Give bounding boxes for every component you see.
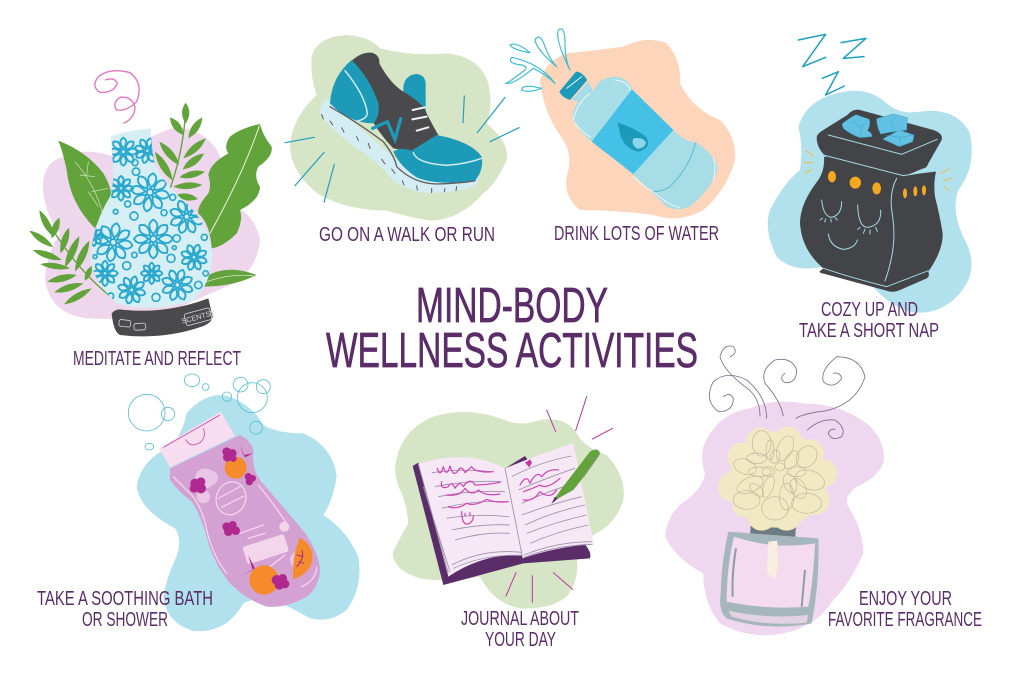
icon: bottle body	[170, 435, 320, 607]
icon: orange glow dots	[828, 171, 926, 198]
caption: nap: TAKE A SHORT NAP	[799, 320, 939, 342]
illustration: shower gel bottle	[128, 374, 359, 631]
icon: sleep Zs	[798, 34, 866, 95]
peach blob	[540, 40, 735, 218]
panel: meditate and reflect	[29, 71, 272, 370]
shoe tongue	[403, 74, 426, 113]
caption: MEDITATE AND REFLECT	[73, 348, 241, 370]
icon: water splash	[506, 29, 570, 91]
icon: fragrance swirls	[709, 346, 865, 439]
illustration: open journal	[393, 397, 624, 609]
blue blob	[768, 91, 972, 313]
caption: walk or run: GO ON A WALK OR RUN	[319, 224, 495, 246]
pink blob	[43, 127, 260, 319]
scribbled writing	[437, 459, 560, 524]
icon: green pen	[551, 450, 600, 504]
pink blob	[665, 402, 884, 635]
illustration: running shoe	[285, 29, 735, 221]
caption: drink water: DRINK LOTS OF WATER	[554, 223, 719, 245]
panel: journal	[393, 397, 624, 651]
pale decoration	[195, 468, 307, 568]
icon: big left leaf	[58, 141, 111, 228]
shoe heel	[330, 60, 379, 123]
shoe stitching and laces	[322, 71, 482, 193]
green blob	[290, 35, 507, 221]
icon: fern upper right	[155, 103, 206, 201]
icon: wax cubes	[842, 114, 914, 147]
sparkle lines	[506, 397, 613, 602]
icon: magenta berries	[190, 445, 289, 590]
icon: diffuser base	[112, 298, 216, 336]
icon: glass bottle	[720, 532, 819, 627]
panel: go on a walk or run	[285, 29, 735, 246]
caption: journal: JOURNAL ABOUT	[461, 608, 579, 630]
icon: bottle cap	[159, 412, 235, 467]
icon: bottle neck	[750, 526, 796, 539]
icon: small bottom leaf	[204, 270, 257, 287]
motion lines	[285, 96, 519, 202]
icon: fern lower left	[29, 210, 110, 304]
icon: warmer body	[800, 110, 943, 292]
title	[326, 279, 698, 378]
caption: journal	[461, 608, 579, 651]
shoe dark upper	[352, 53, 438, 152]
illustration: fragrance flower diffuser	[665, 346, 884, 635]
shoe toe	[393, 135, 482, 183]
title: WELLNESS ACTIVITIES	[326, 324, 698, 378]
panel: bath or shower	[37, 374, 359, 631]
illustration: aroma diffuser with leaves	[29, 71, 272, 336]
icon: soap bubbles	[128, 374, 270, 450]
icon: wavy right leaf	[198, 124, 272, 248]
shoe sole	[320, 98, 480, 193]
caption: nap: COZY UP AND	[821, 299, 918, 321]
icon: diffuser base: SCENTSY	[180, 308, 216, 326]
blue blob	[137, 395, 359, 631]
journal pages	[418, 443, 594, 577]
caption: bath: TAKE A SOOTHING BATH	[37, 588, 213, 610]
caption: journal: YOUR DAY	[485, 629, 556, 651]
journal cover	[413, 456, 590, 585]
icon: flower	[718, 427, 837, 531]
illustration: sleeping wax warmer	[768, 34, 972, 313]
title: MIND-BODY	[416, 279, 608, 333]
icon: vase	[85, 128, 212, 308]
icon: steam swirl	[95, 71, 139, 123]
glow lines	[804, 151, 951, 191]
panel: nap	[768, 34, 972, 342]
label highlights	[173, 477, 317, 587]
caption: nap	[799, 299, 939, 342]
caption: bath: OR SHOWER	[82, 609, 168, 631]
caption: fragrance: ENJOY YOUR	[859, 588, 952, 610]
icon: orange fruit	[225, 457, 312, 595]
panel: fragrance	[665, 346, 982, 635]
green blob	[393, 412, 624, 609]
icon: water bottle	[559, 72, 718, 209]
caption: bath	[37, 588, 213, 631]
caption: fragrance	[828, 588, 982, 631]
